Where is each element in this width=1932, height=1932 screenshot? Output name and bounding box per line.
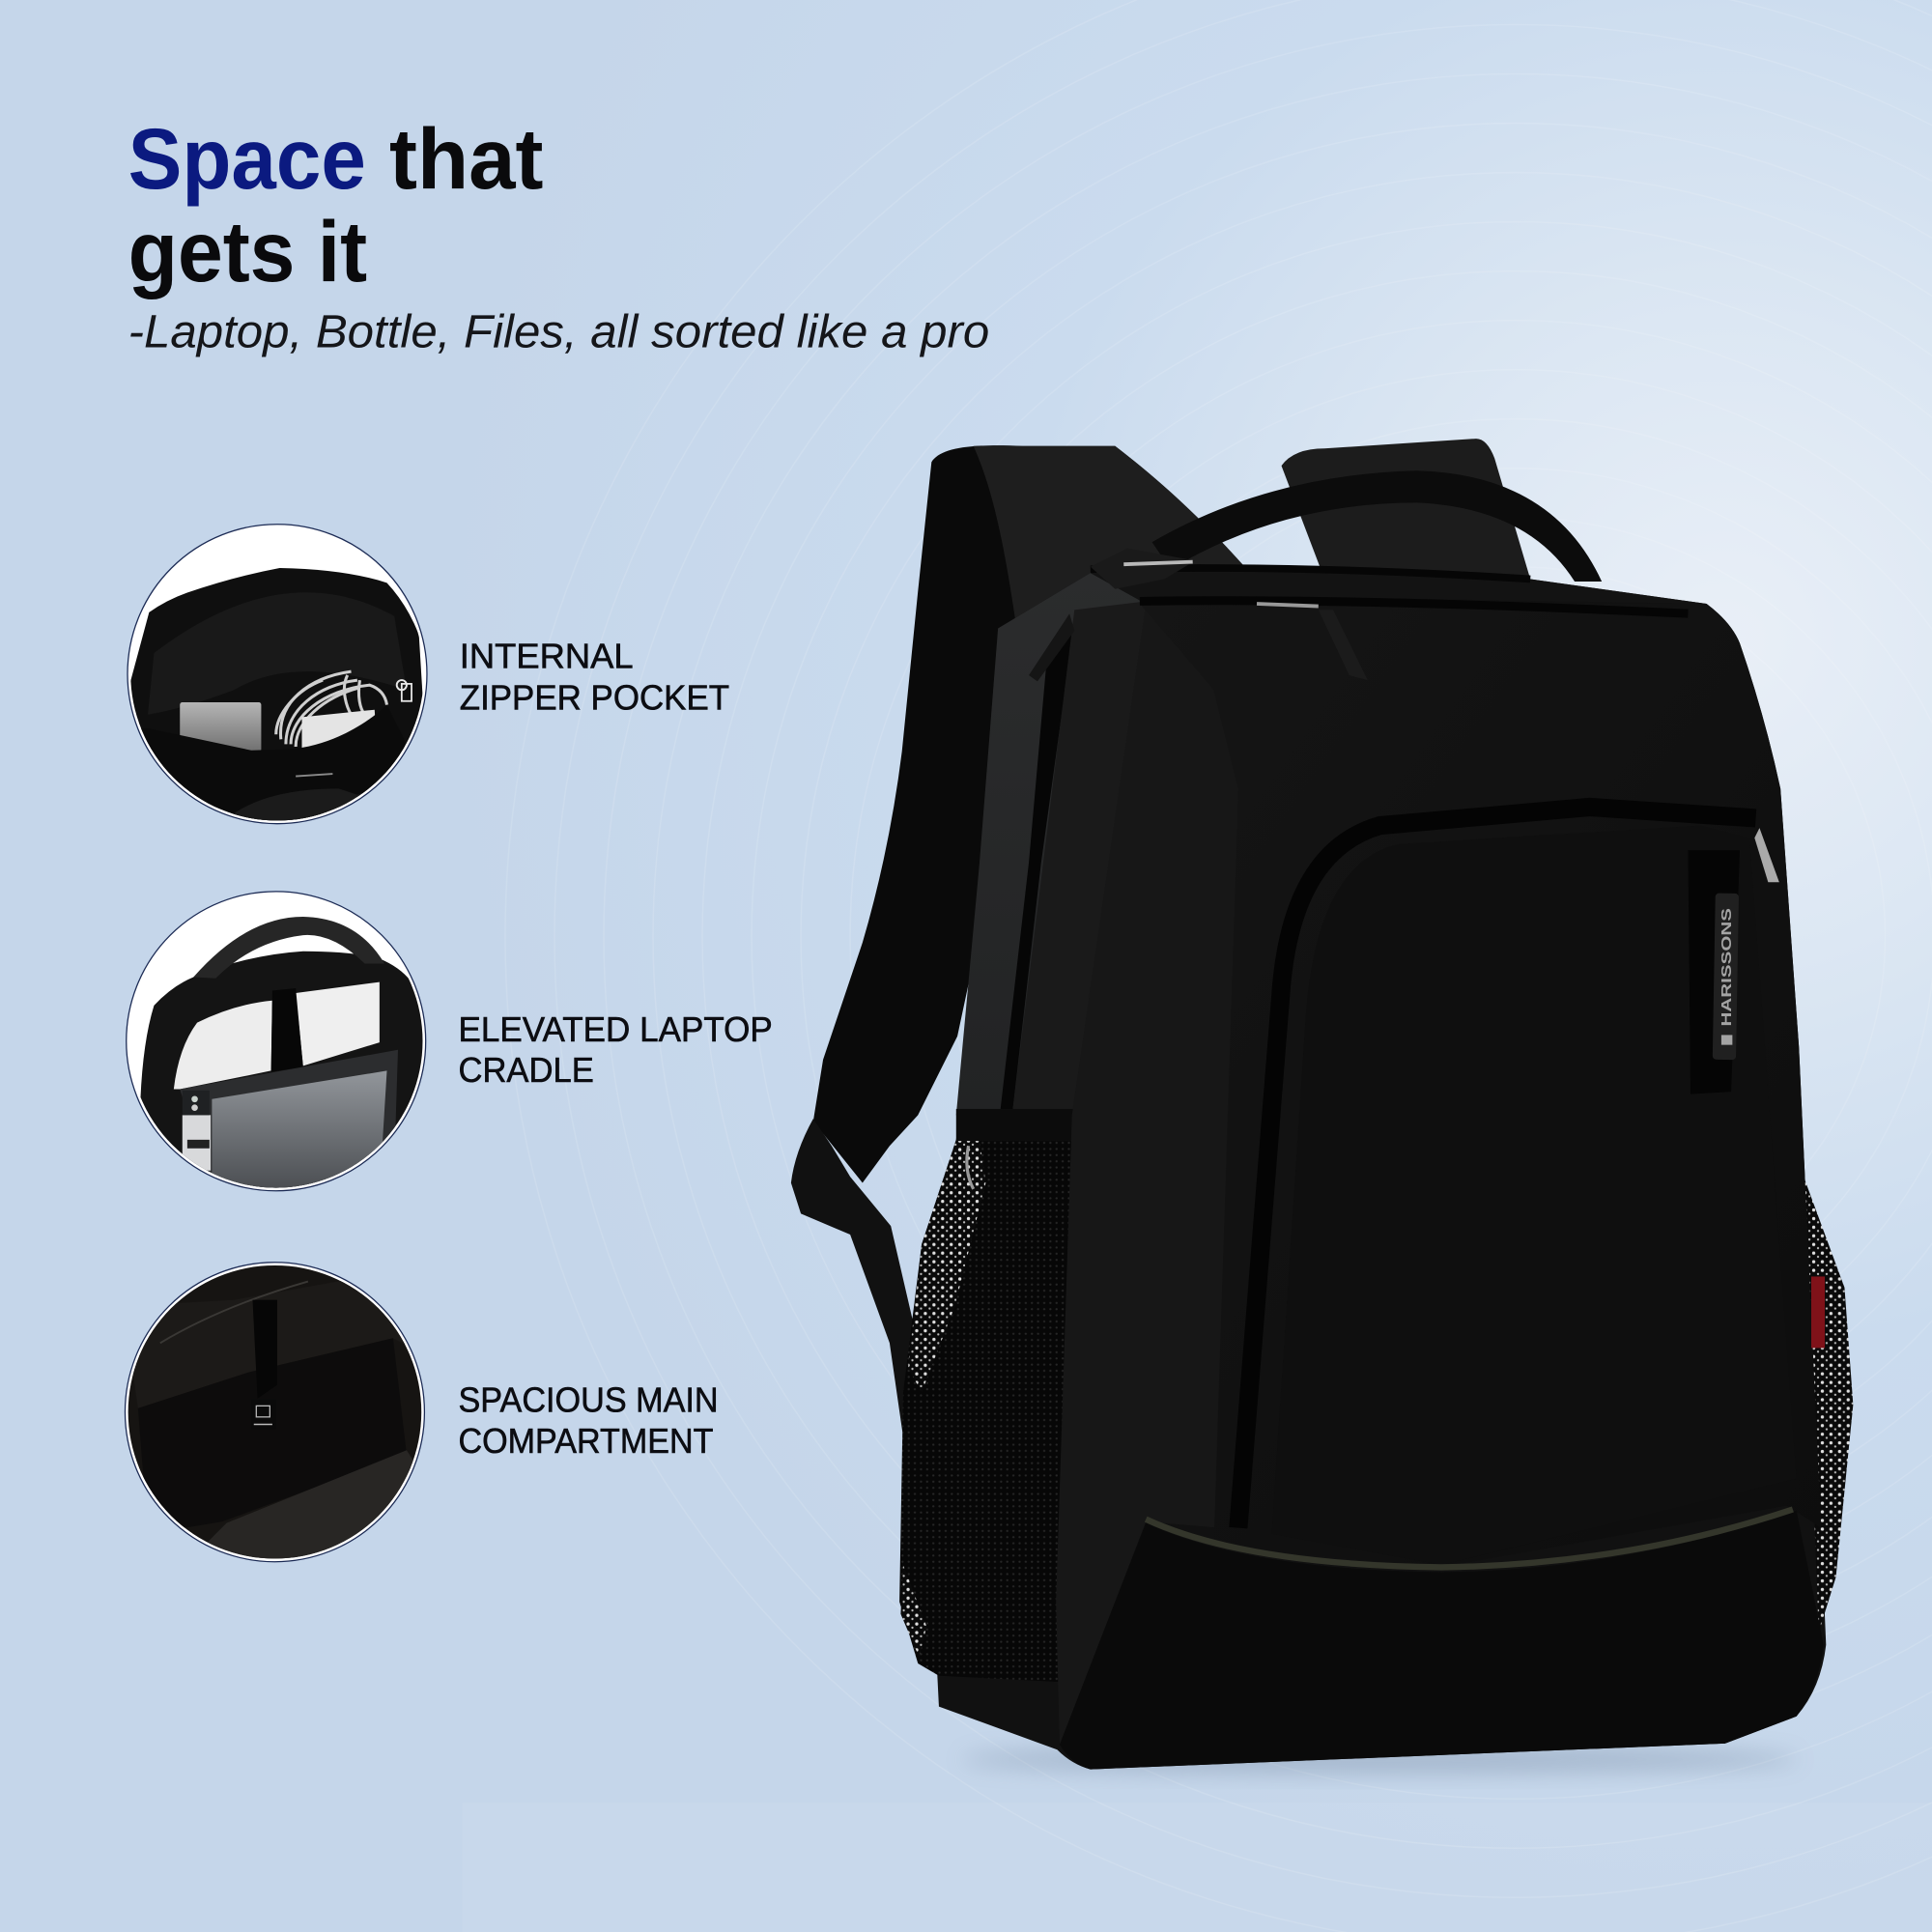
heading [128, 110, 543, 299]
label: elevated laptop cradle [458, 1010, 773, 1090]
side panel [956, 573, 1146, 1115]
circle photo: main compartment [124, 1257, 431, 1565]
heading: Space [128, 110, 366, 207]
feature: internal zipper pocket [124, 525, 729, 838]
front panel [1140, 604, 1821, 1567]
red side tag [1811, 1276, 1825, 1348]
lower strap and buckle [791, 1119, 918, 1454]
backpack [791, 439, 1853, 1775]
right mesh pocket [1802, 1171, 1853, 1633]
label: elevated laptop cradle: ELEVATED LAPTOP [458, 1010, 773, 1049]
brand pull tab with HARISSONS label: HARISSONS [1719, 908, 1735, 1026]
feature: elevated laptop cradle [127, 892, 773, 1195]
subtitle: -Laptop, Bottle, Files, all sorted like a pro [128, 306, 989, 358]
right shoulder strap [1282, 439, 1530, 579]
top lid zipper [1091, 568, 1707, 604]
front pocket [1271, 826, 1797, 1565]
label: elevated laptop cradle: CRADLE [458, 1051, 594, 1090]
heading: gets it [128, 203, 367, 299]
heading: that [389, 110, 543, 207]
front pocket zipper [1238, 807, 1756, 1528]
side mesh band [956, 1109, 1079, 1141]
front gusset [1056, 601, 1238, 1745]
label: spacious main compartment [458, 1381, 719, 1461]
circle photo: laptop cradle [127, 892, 426, 1195]
brand pull tab with HARISSONS label [1688, 850, 1740, 1094]
circle photo: zipper pocket [124, 525, 431, 838]
shadow [961, 1745, 1799, 1775]
label: internal zipper pocket: ZIPPER POCKET [460, 679, 729, 718]
piping trim [1146, 1509, 1793, 1567]
label: spacious main compartment: SPACIOUS MAIN [458, 1381, 719, 1420]
top handle [1152, 470, 1602, 582]
body silhouette [936, 568, 1826, 1770]
label: internal zipper pocket [460, 637, 729, 718]
zipper pulls [1029, 549, 1779, 882]
label: internal zipper pocket: INTERNAL [460, 637, 634, 675]
left shoulder strap [813, 445, 1247, 1182]
left mesh pocket [899, 1140, 1078, 1682]
bottom panel [1060, 1511, 1824, 1770]
label: spacious main compartment: COMPARTMENT [458, 1422, 714, 1461]
feature: spacious main compartment [124, 1257, 719, 1565]
